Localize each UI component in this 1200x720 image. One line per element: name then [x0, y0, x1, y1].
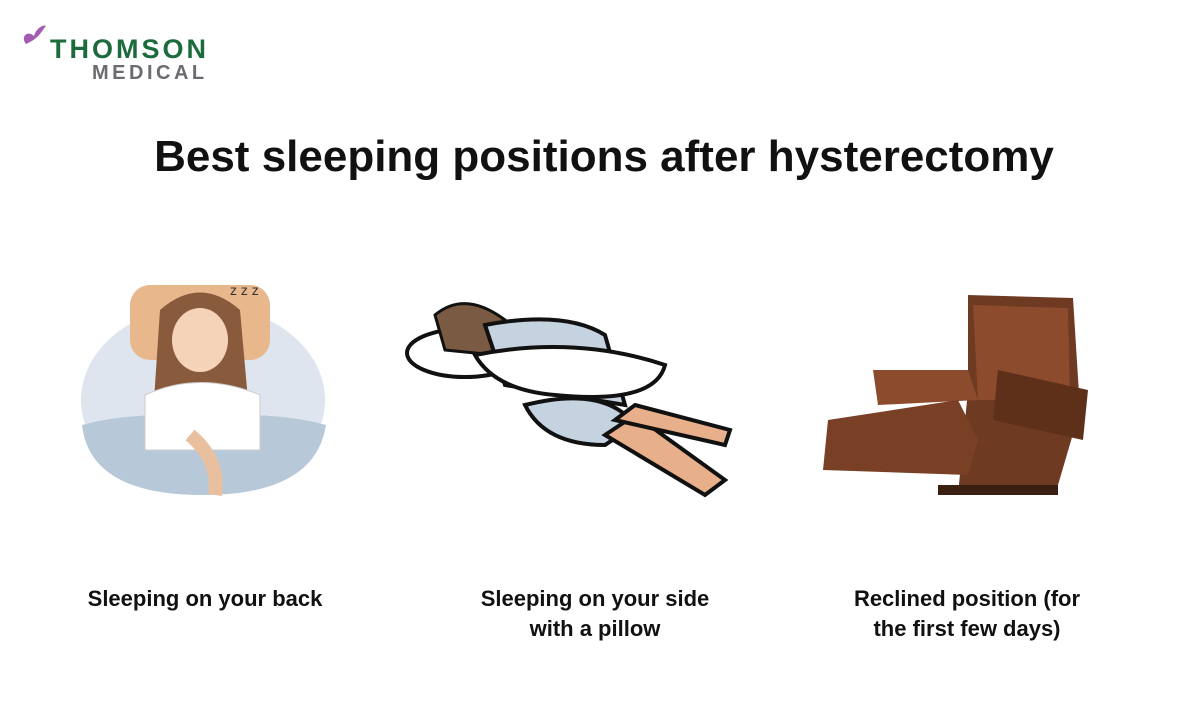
illustration: back sleeper: z z z [230, 282, 259, 298]
label: reclined [854, 586, 1080, 641]
label: back: Sleeping on your back [88, 586, 322, 611]
label: reclined: the first few days) [873, 616, 1061, 641]
title: Best sleeping positions after hysterectomy [154, 132, 1054, 181]
label: side: Sleeping on your side [481, 586, 709, 611]
logo [24, 26, 209, 84]
label: reclined: Reclined position (for [854, 586, 1080, 611]
label: side [481, 586, 709, 641]
icon: butterfly [24, 26, 46, 44]
illustration: side sleeper [405, 302, 732, 498]
logo: MEDICAL [92, 62, 208, 84]
illustration: back sleeper [81, 282, 326, 496]
illustration: recliner chair [823, 295, 1088, 495]
logo text: THOMSON [50, 34, 209, 64]
label: side: with a pillow [530, 616, 660, 641]
